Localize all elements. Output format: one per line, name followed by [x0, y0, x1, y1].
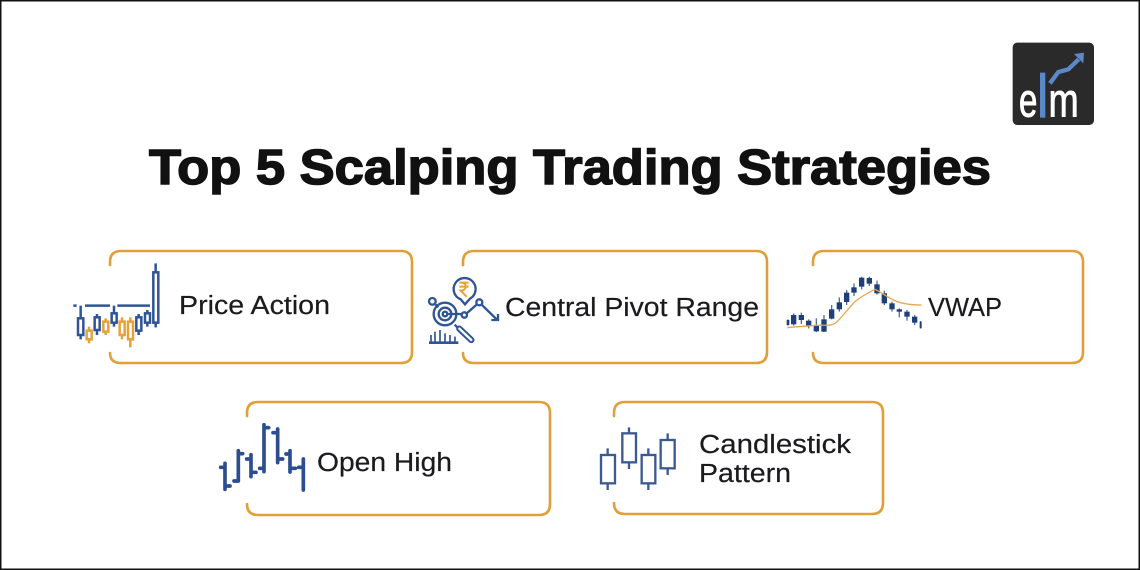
icon: candlesticks: [601, 427, 675, 490]
logo: elm: e: [1019, 74, 1037, 127]
logo: elm: m: [1049, 74, 1079, 127]
panel: price action: [73, 251, 412, 363]
logo: elm: [1013, 43, 1094, 127]
label: candlestick pattern: Pattern: [699, 460, 791, 488]
title: Top 5 Scalping Trading Strategies: [149, 141, 991, 195]
panel: vwap: [787, 251, 1083, 363]
icon: open high bars: [221, 425, 303, 490]
label: price action: Price Action: [179, 292, 330, 320]
icon: rupee target analysis: [429, 278, 498, 343]
label: open high: Open High: [317, 449, 452, 477]
panel: candlestick pattern: [601, 402, 883, 514]
label: central pivot range: Central Pivot Range: [505, 294, 759, 322]
panel: central pivot range: [429, 251, 767, 363]
label: candlestick pattern: Candlestick: [699, 431, 851, 459]
label: vwap: VWAP: [928, 294, 1002, 322]
icon: price action candlesticks: [73, 263, 158, 347]
icon: vwap chart: [787, 277, 922, 332]
panel: open high: [221, 402, 550, 515]
